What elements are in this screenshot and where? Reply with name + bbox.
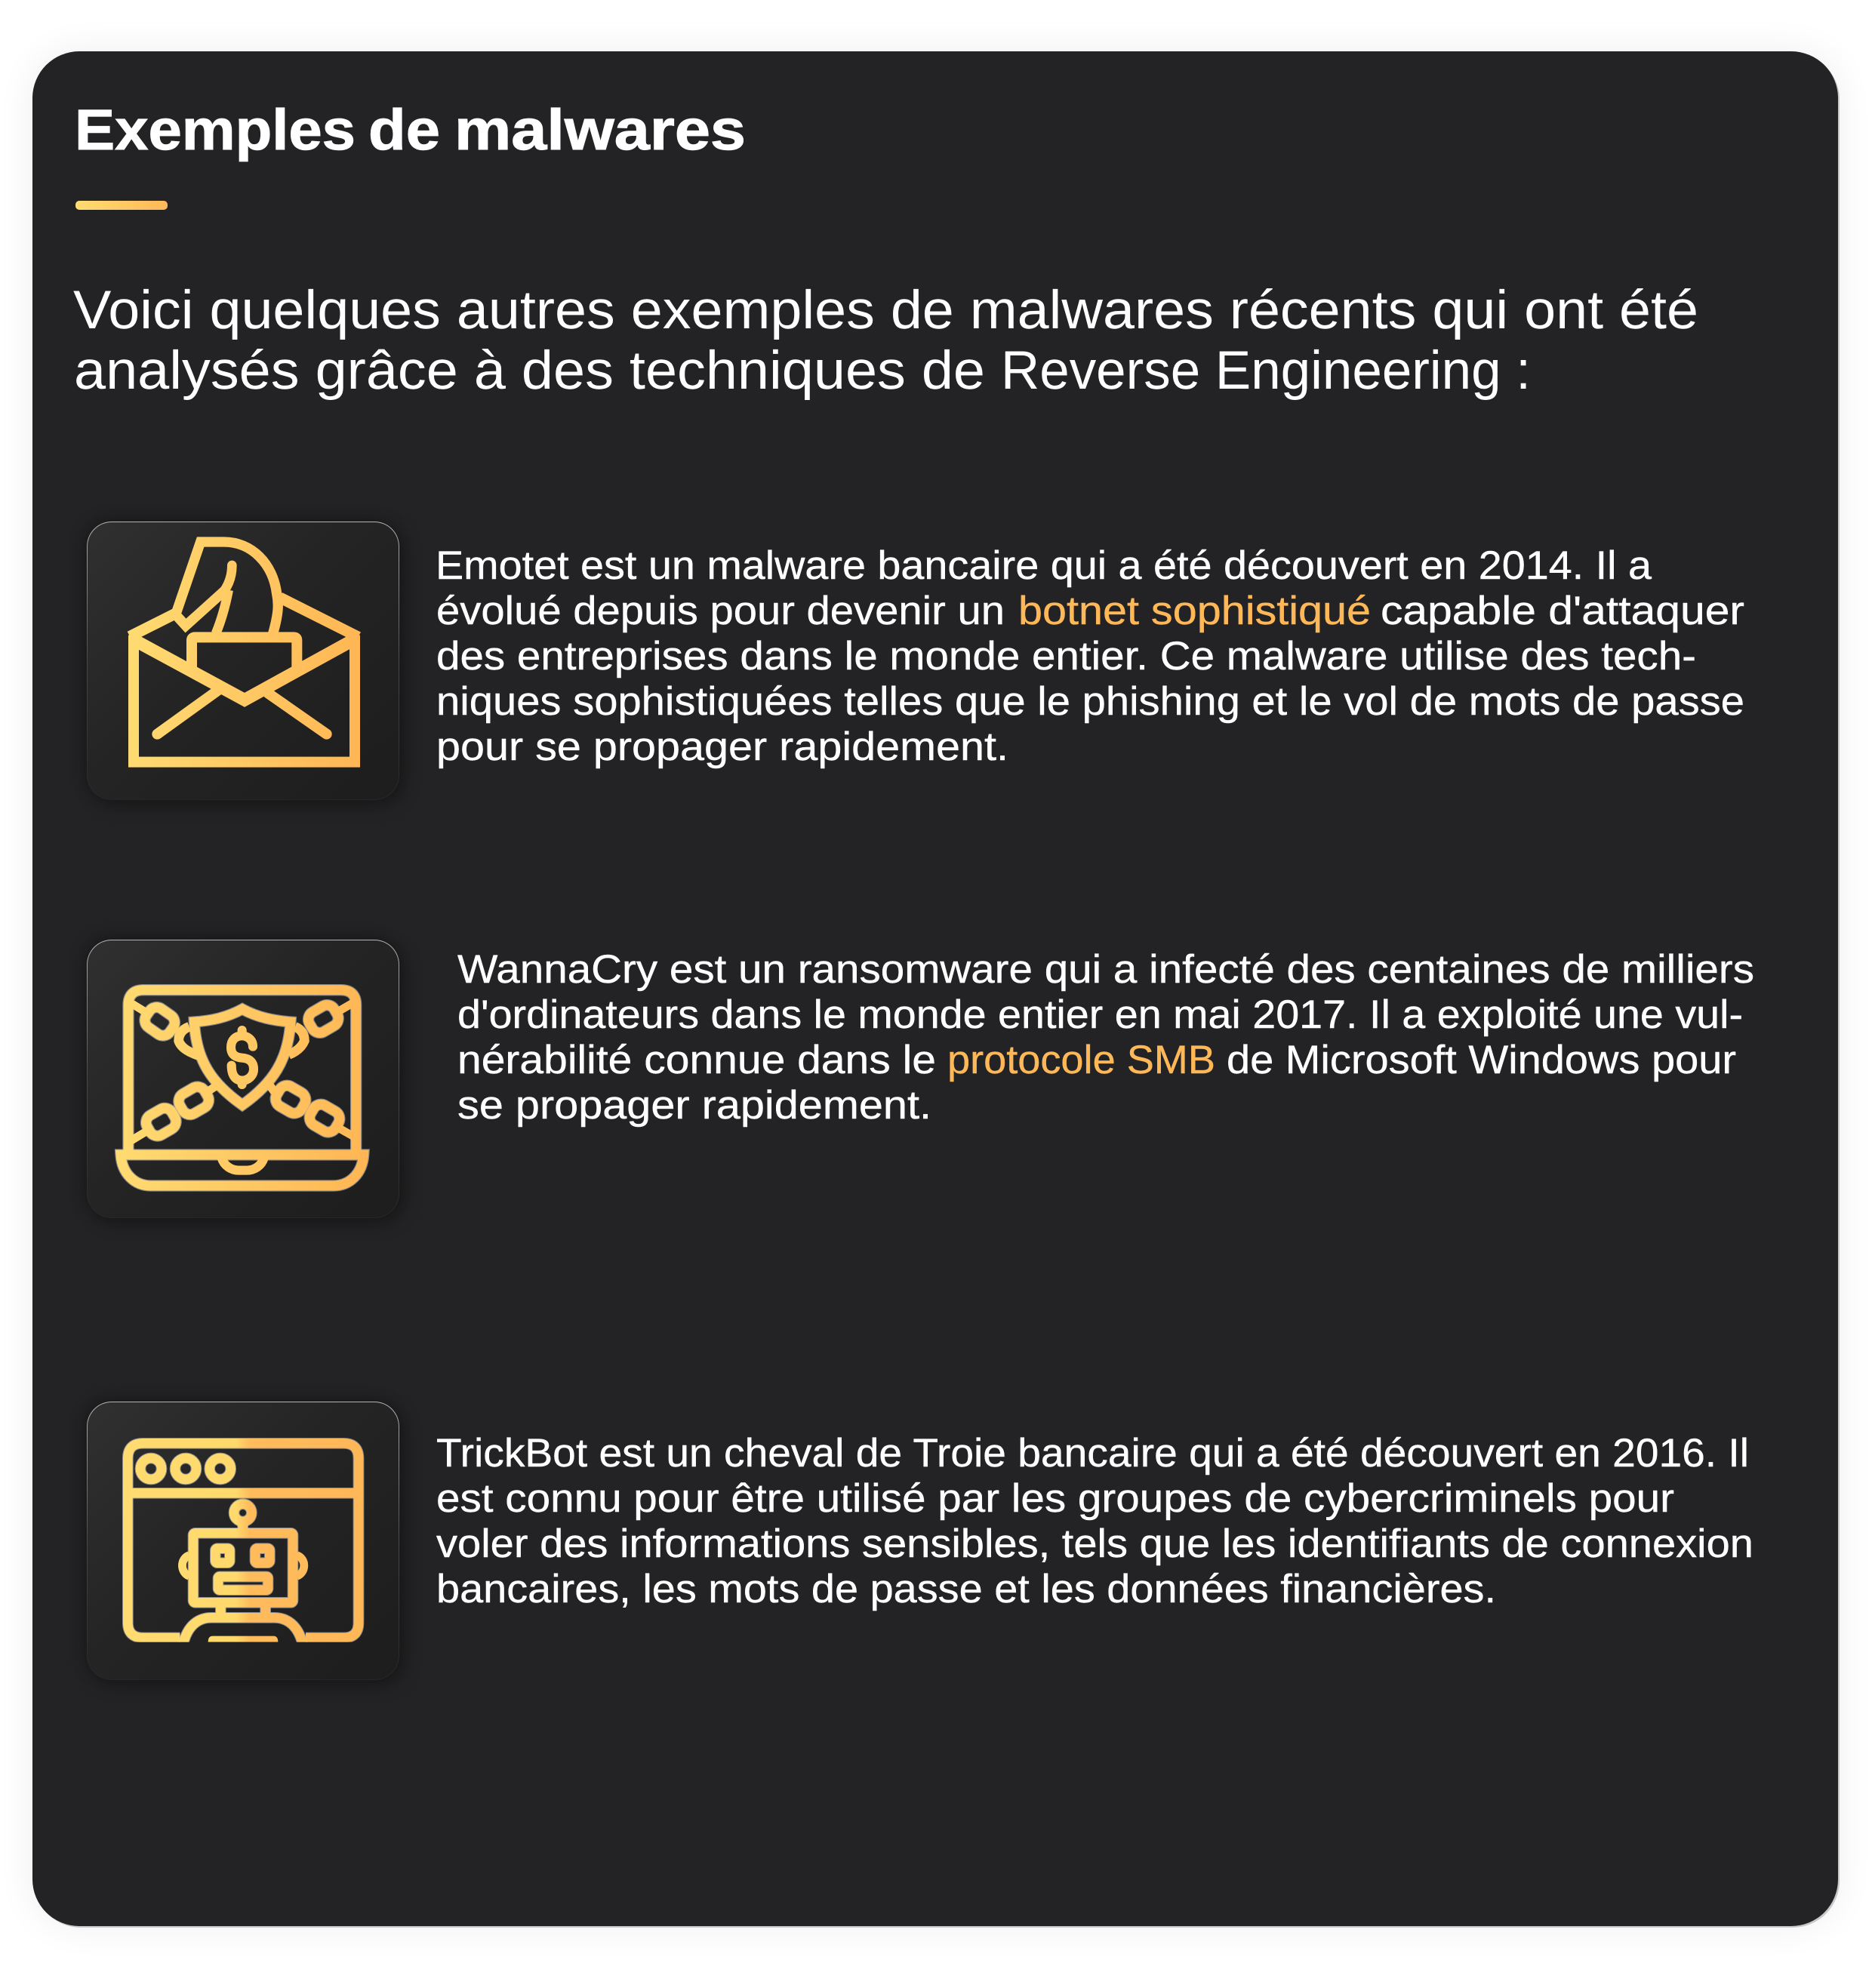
text: WannaCry [457,947,1754,1128]
title: Exemples [75,98,356,162]
text: WannaCry: d'ordinateurs dans le monde entier en mai 2017. Il a exploité une vul- [457,992,1743,1037]
text: Emotet [436,543,1744,769]
intro text: Reverse Engineering : [1001,340,1531,401]
title: malwares [454,98,746,162]
text: TrickBot: bancaires, les mots de passe et les données financières. [436,1567,1496,1611]
title [75,98,746,162]
icon card: trojan bot window [87,1402,399,1680]
text: Emotet: botnet sophistiqué [1018,589,1371,633]
intro text [73,280,1698,401]
icon: phishing hook envelope [127,537,361,768]
text: WannaCry: WannaCry est un ransomware qui a infecté des centaines de milliers [457,947,1754,992]
text: Emotet: pour se propager rapidement. [436,725,1008,769]
text: Emotet: Emotet est un malware bancaire qui a été découvert en 2014. Il a [436,543,1652,588]
text: Emotet: capable d'attaquer [1381,589,1744,633]
icon: robot in browser window [122,1438,364,1642]
text: TrickBot: TrickBot est un cheval de Troie bancaire qui a été découvert en 2016. Il [436,1431,1749,1476]
text: WannaCry: nérabilité connue dans le [457,1038,936,1082]
icon card: phishing envelope [87,522,399,800]
text: TrickBot: voler des informations sensibles, tels que les identifiants de connexion [436,1522,1753,1566]
intro text: Voici quelques autres exemples de malwares récents qui ont été [73,280,1698,340]
icon: chained laptop with dollar shield [115,984,370,1192]
text: WannaCry: protocole SMB [947,1038,1215,1082]
title: de [368,98,440,162]
intro text: analysés grâce à des techniques de [74,340,985,401]
text: TrickBot: est connu pour être utilisé par les groupes de cybercriminels pour [436,1476,1674,1521]
text: Emotet: évolué depuis pour devenir un [436,589,1005,633]
title accent bar [75,201,168,210]
text: Emotet: niques sophistiquées telles que le phishing et le vol de mots de passe [436,679,1744,724]
icon card: ransomware laptop [87,940,399,1218]
text: Emotet: des entreprises dans le monde entier. Ce malware utilise des tech- [436,634,1696,679]
text: TrickBot [436,1431,1753,1611]
text: WannaCry: de Microsoft Windows pour [1227,1038,1736,1082]
text: WannaCry: se propager rapidement. [457,1083,931,1128]
